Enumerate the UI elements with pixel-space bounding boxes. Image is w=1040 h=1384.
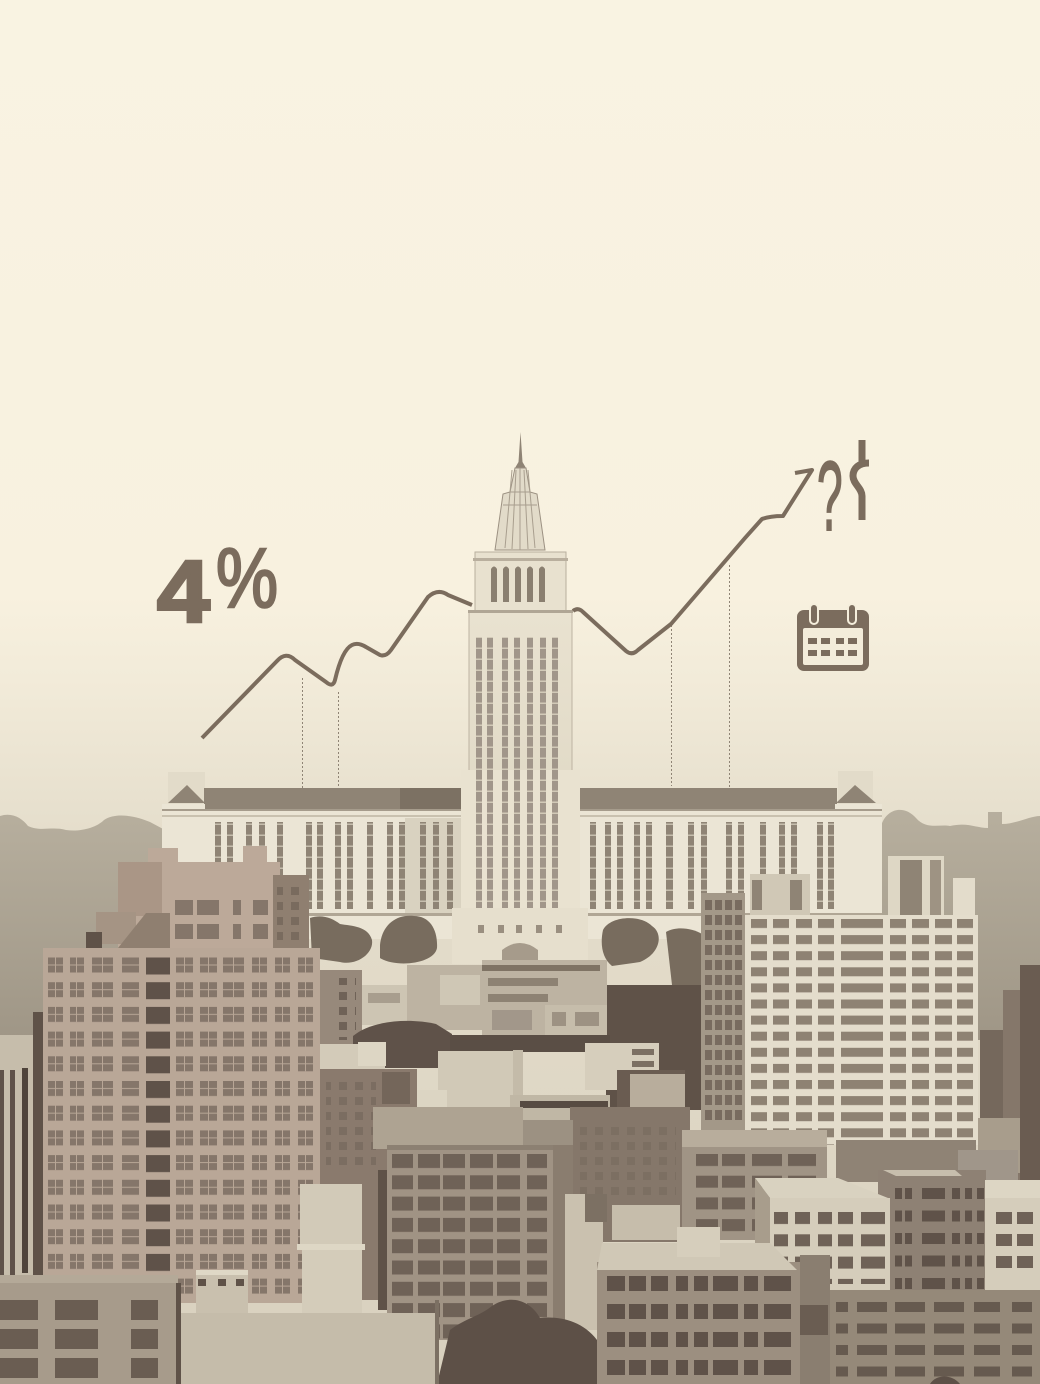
white office building xyxy=(745,915,978,1145)
brown office right xyxy=(878,1170,986,1295)
light mid-left buildings xyxy=(320,1042,523,1184)
light office far right xyxy=(985,1180,1040,1298)
mid window building xyxy=(362,1145,553,1340)
foreground tree xyxy=(437,1300,597,1384)
dark tree band xyxy=(353,1021,452,1068)
4% statistic: % xyxy=(216,531,278,625)
trees behind city xyxy=(310,916,702,985)
lower right office xyxy=(800,1255,1040,1384)
icon: question mark: ? xyxy=(817,443,843,552)
central tower xyxy=(452,432,588,964)
window tower beside white building xyxy=(701,893,745,1130)
white tower block xyxy=(297,1184,365,1315)
lower office foreground xyxy=(597,1227,800,1384)
4% statistic xyxy=(157,531,278,641)
palace right wing xyxy=(579,771,882,939)
tower base xyxy=(452,908,588,964)
far-right dark towers xyxy=(978,965,1040,1180)
dark mid-ground block xyxy=(606,985,702,1110)
pink residential building xyxy=(43,948,320,1303)
left dark striped building xyxy=(0,1012,43,1275)
rooftop block right xyxy=(836,1140,1018,1182)
distant hills xyxy=(0,810,1040,1040)
tower crown block xyxy=(475,552,566,612)
small central buildings xyxy=(320,960,607,1050)
light lower-centre buildings xyxy=(565,1194,680,1330)
lower centre block xyxy=(373,1107,690,1340)
spire xyxy=(515,432,526,468)
foreground pale building xyxy=(181,1270,439,1384)
dotted drop lines xyxy=(302,565,730,790)
trend line chart with arrow xyxy=(202,470,812,738)
icon: broken currency glyph xyxy=(853,440,869,520)
light office with roof xyxy=(755,1178,890,1296)
foreground left office xyxy=(0,1275,181,1384)
icon: calendar xyxy=(797,604,869,671)
mid-right cluster xyxy=(510,1043,685,1137)
right mid window building xyxy=(682,1130,827,1240)
tower shaft xyxy=(469,612,572,772)
4% statistic: 4 xyxy=(157,543,210,641)
rooftop towers behind white building xyxy=(750,856,975,918)
pink building upper section xyxy=(86,846,309,952)
palace left wing xyxy=(162,772,462,939)
